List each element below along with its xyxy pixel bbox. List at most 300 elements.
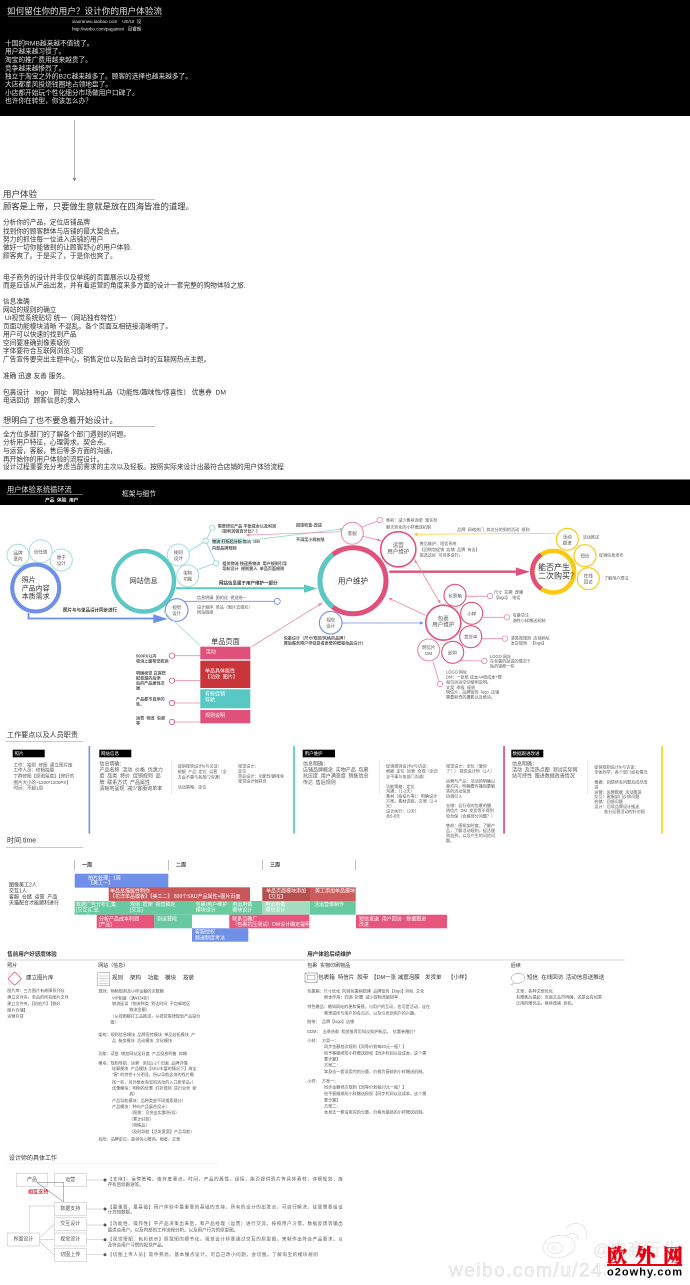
gantt bars: 分析产品成本利润 bbox=[99, 915, 139, 922]
panel: single product page: 明确视觉 白族搭 bbox=[136, 669, 166, 675]
column: photo library: 建立文件夹。【拍拍片】【修好 bbox=[7, 1000, 61, 1006]
team note: 图像美工2人 bbox=[9, 882, 37, 889]
column: data follow-up: 进 bbox=[594, 783, 598, 789]
column: photo library: 照片 bbox=[7, 962, 17, 969]
band label: 框架与细节 bbox=[122, 489, 156, 498]
text block: information accuracy: 空间要准确到像素级别 bbox=[3, 338, 70, 346]
column: user care: 传达 售后规则 bbox=[303, 779, 336, 786]
column: website: （累计好款） bbox=[129, 1115, 154, 1121]
heading: after-sale: 用户体验后续维护 bbox=[307, 950, 352, 958]
arrow: user care to repeat purchase bbox=[389, 568, 530, 576]
column: follow-up: 有赠售后提起：页面文品符明确，还是会有如果 bbox=[516, 993, 602, 999]
gantt bars: 活运营像制作 bbox=[314, 901, 344, 908]
circle group: repeat purchase: 能否产生 bbox=[538, 562, 570, 572]
column: user care: 促销规则设计le与访谈： bbox=[386, 762, 430, 768]
gantt bars: 短信发送 用户回访 · 数据跟进 bbox=[359, 915, 426, 922]
column: parcel print: 减震泡膜 bbox=[398, 973, 420, 981]
circle group: parcel care: 小样 bbox=[467, 610, 477, 617]
circle group: repeat purchase: 短信 bbox=[580, 552, 590, 559]
week ticks: 三周 bbox=[270, 862, 280, 868]
gantt bars: 单品页面模块添加 bbox=[266, 888, 306, 895]
week ticks: 一周 bbox=[82, 862, 92, 868]
column: parcel print: 特色赠品：赠如网站的便和情感。与用户的互动，也可是活动，诠在 bbox=[307, 1002, 430, 1008]
column: parcel print: 特信片 bbox=[338, 973, 354, 981]
column: parcel print: 同步金额档次规则【同等价划每20元一瓶？】 bbox=[324, 1042, 406, 1048]
column: photo library: 运营存贷 bbox=[7, 1012, 24, 1018]
column: parcel print: 【DM一张 bbox=[371, 973, 397, 981]
column: data follow-up: 设计：后续品牌设计推送 bbox=[594, 802, 639, 808]
logo: o2owhy: 欧外网 bbox=[607, 1240, 683, 1269]
author credit: http://weibo.com/pagainini 目睿朗 bbox=[72, 25, 142, 32]
text block: information accuracy: 电话回访 顾客信息的录入 bbox=[3, 395, 81, 404]
column: website: 品 服务模块 活动模块 文化模块 bbox=[112, 1036, 172, 1042]
circle group: user care: 赛后服务用户带促意者更要的赠驱动品设计） bbox=[284, 639, 366, 645]
circle group: parcel care: 每位运运空间使用说明。 bbox=[446, 678, 491, 684]
column: parcel print: 胶带： 品牌【logo】店铺 bbox=[307, 1018, 354, 1024]
column: website info: 活动策略：定位 bbox=[178, 783, 206, 789]
circle group: user care: 运营 bbox=[393, 541, 404, 549]
circle group: website info: 架构 bbox=[183, 569, 193, 576]
column: user care: 明信片 DM 发货等不得到 bbox=[446, 806, 494, 812]
icon: weibo logo bbox=[542, 1223, 587, 1260]
text block: ecommerce design: 而是应该从产品出发，并有着运营的角度来多方面的设计一套完整的购物体验之旅. bbox=[3, 280, 246, 289]
subheading: 顾客是上帝，只要做生意就是放在四海皆准的道理。 bbox=[3, 202, 194, 212]
column: website: 值） bbox=[110, 1018, 118, 1024]
panel: single product page: 运费 物流 包邮 bbox=[136, 714, 165, 720]
gantt bars: 赠送制度考法 bbox=[195, 934, 225, 941]
gantt bars bbox=[75, 874, 447, 942]
circle group: website info: 相关物流 快递费物流 用户规则引导 bbox=[222, 560, 287, 566]
column: photo: 图片大小的~1200*1200PX】 bbox=[14, 778, 71, 786]
circle group: parcel care: 溶性小样赠送机制 bbox=[513, 616, 545, 622]
gantt bars: 单品总描属性制作 bbox=[110, 888, 150, 895]
text block: visual: 及符合用户习惯的视觉产品。 bbox=[108, 1241, 166, 1248]
intro text: 淘宝的推广费用越来越贵了。 bbox=[5, 54, 92, 64]
column: user care: 根据 定位 运营 合规（全自 bbox=[386, 767, 438, 773]
panel: single product page: 属 bbox=[136, 684, 140, 690]
circle group: website info: （能利润做百分比？） bbox=[219, 527, 260, 533]
text block: interaction: 最适合用户。以及内部的工作流程分析。以及用户行为的原型图。 bbox=[108, 1226, 238, 1233]
circle group: parcel care: 发货规则 【logo】 bbox=[511, 639, 546, 645]
arrow: website to user care bbox=[176, 580, 317, 593]
text block: information accuracy: 信息准确 bbox=[3, 296, 30, 305]
column: website info: 视觉设计： bbox=[238, 762, 258, 768]
org chart: 产品 bbox=[27, 1176, 37, 1183]
column: website info: 牌 联系方式 产品属性 bbox=[100, 779, 150, 786]
text block: information accuracy: 准确 迅速 友善 服务。 bbox=[3, 370, 69, 380]
org chart bbox=[7, 1173, 106, 1261]
text block: data support: 【最重要、最基础】用户体验中最重要的基础的支持。所有的设计的出发点，可自行解决。往里需要给设 bbox=[108, 1203, 343, 1210]
arrow: website to user care: 网站信息属于用户维护一部分 bbox=[219, 580, 278, 586]
circle group: repeat purchase: 活动 bbox=[563, 533, 572, 540]
gantt bars: 客服授权 bbox=[195, 929, 215, 936]
circle group: parcel care: 贴的锁断一些 bbox=[490, 662, 515, 668]
band subtitle: 产品 体验 用户 bbox=[45, 496, 79, 504]
column: website info: 视觉设计倾斜页 bbox=[238, 777, 267, 783]
circle group: parcel care: 需要新奇的摄影以及绝活。 bbox=[446, 693, 495, 699]
column: follow-up: 短信 bbox=[527, 973, 539, 981]
column: user care: 意方向，明确要传播和要解 bbox=[446, 782, 495, 788]
panel: single product page: 后的产品属性次 bbox=[136, 679, 165, 685]
text block: visual: 【视觉搭配、色彩统示】原型图的细节化。视觉设计师要通过交互的原型图。来制作出符合产品要求。以 bbox=[108, 1235, 343, 1242]
logo: o2owhy bbox=[606, 1240, 684, 1281]
column: follow-up bbox=[511, 962, 605, 1005]
circle group: parcel care: 文案 季报 规则 bbox=[446, 684, 475, 690]
circle group: parcel care: LOGO 网址 bbox=[490, 652, 511, 658]
panel: single product page: 【功效 图片】 bbox=[205, 674, 238, 681]
circle group: user care: 包裹设计（尺寸/规范/风格的品牌？ bbox=[284, 634, 347, 640]
circle group: parcel care: 清类视规则 店铺网址 bbox=[511, 634, 550, 640]
intro text: 十国的RMB越来越不值钱了。 bbox=[5, 38, 93, 47]
circle group: user care: 售后维护：短信系统 bbox=[420, 540, 457, 546]
column: website: 模块：规则导航：运营 添加1-2个页面 品牌详情 bbox=[98, 1059, 188, 1065]
gantt bars: [产品] bbox=[99, 921, 112, 928]
circle group: repeat purchase: 活动推送 bbox=[583, 533, 599, 539]
column: parcel print: 【小样】 bbox=[448, 973, 470, 981]
circle group: repeat purchase: 回访 bbox=[584, 578, 593, 585]
gantt bars: 美工添加单品模块 bbox=[315, 888, 355, 895]
column: follow-up: 活动信息送推送 bbox=[566, 973, 605, 981]
column: photo: 照片 bbox=[14, 750, 24, 757]
column: parcel print: 小样： 方案一： bbox=[307, 1036, 338, 1042]
column: user care: 品，了解活动规则，促活规 bbox=[446, 826, 495, 832]
column: parcel print: 本身去一套设用完的分量，价格为基础的小样赠送机制。 bbox=[324, 1108, 426, 1114]
column: website: 找一些，另外根本淘宝的活动的入口新单品。） bbox=[112, 1078, 196, 1084]
org chart: 交互设计 bbox=[60, 1220, 80, 1227]
column: website info: 产品名称 活动 价格 优惠力 bbox=[100, 767, 163, 774]
column: website: 有阳：品牌定位，超领信心赠领。图者，文案 bbox=[98, 1135, 180, 1141]
column: user care: 信息明确： bbox=[303, 760, 328, 767]
circle group: parcel care: DM bbox=[425, 650, 432, 656]
circle group: parcel care: LOGO 网址 bbox=[446, 668, 467, 674]
intro text: 用户越来越习惯了。 bbox=[5, 46, 65, 55]
icon: page bbox=[98, 973, 110, 986]
circle group: parcel care: 在包裹的贴说的情况下 bbox=[490, 657, 531, 663]
panel: single product page: 产品都市自承的 bbox=[136, 695, 165, 701]
column: parcel print: 要计算】 bbox=[324, 1055, 340, 1061]
column: user care: 抗压度 用户满意度 销售信息 bbox=[303, 773, 369, 780]
org chart: 相互支持 bbox=[28, 1188, 48, 1195]
column: website: 轮廓模块 产品模块【SKU丰富的情况下】海宝 bbox=[112, 1064, 196, 1070]
column: website: 网站（信息） bbox=[98, 962, 128, 969]
column: website: 产品模块：种向产品展合设计） bbox=[112, 1102, 169, 1108]
column: website info: 根据 产品 定位 运营 （全 bbox=[178, 768, 227, 774]
gantt bars: 【交互】 bbox=[266, 893, 286, 900]
circle group: visual design: 设计 bbox=[172, 610, 182, 616]
panel: single product page: 500PX以内 bbox=[136, 652, 156, 658]
circle group: parcel care: 尺寸 抗撕 厚膜 bbox=[494, 588, 523, 594]
column: user care: 答的活动信息 bbox=[446, 787, 471, 793]
text block: analysis: 找到你的顾客群体与店铺的最大契合点。 bbox=[3, 226, 123, 235]
circle group: user care: 聊天转化的小样赠送机制 bbox=[386, 523, 431, 529]
column: user care: 运营与产品：活动的明确以 bbox=[446, 777, 495, 783]
panel: single product page: 导航 bbox=[205, 696, 215, 703]
arrows: parcel care links bbox=[388, 559, 440, 615]
column: follow-up: 文案：各种文案优化 bbox=[516, 987, 553, 993]
column: website bbox=[98, 962, 200, 1141]
column: website: 功能：读尝 增加网站足好度 产品投放明鲁 抑稿 bbox=[98, 1050, 187, 1056]
column: parcel print: 发货单 bbox=[425, 973, 442, 981]
heading: work points: 工作要点以及人员职责 bbox=[7, 730, 78, 739]
circle group: website info: 功能 bbox=[183, 575, 193, 582]
panel: single product page: 规则说明 bbox=[205, 712, 225, 719]
column: website: （图景：可突出实惠/折扣） bbox=[129, 1108, 179, 1114]
column: parcel print: 胶带 bbox=[357, 973, 369, 981]
intro text: 大店都拿风投烧钱圈地占领地盘了。 bbox=[5, 79, 112, 88]
gantt bars: 【美工一】 bbox=[88, 880, 113, 887]
column: user care: 天） bbox=[386, 803, 394, 808]
column: parcel print: 方案二： bbox=[324, 1061, 340, 1067]
circle group: website info bbox=[113, 521, 325, 612]
circle group: photo: 信任感 bbox=[34, 548, 48, 555]
column: parcel print: 包裹箱 bbox=[318, 973, 335, 981]
gantt bars: 模块设计 bbox=[232, 906, 252, 913]
column: website: 券） bbox=[129, 1090, 137, 1096]
watermark: weibo bbox=[448, 1223, 678, 1282]
heading: user experience: 用户体验 bbox=[3, 189, 38, 199]
column: website: 物流延误（物流种类 到达时间 不包邮地区 bbox=[112, 1000, 190, 1006]
circle group: photo: 产品内容 bbox=[22, 583, 50, 592]
org chart: 数据支持 bbox=[60, 1205, 80, 1212]
column: website: 模块 bbox=[165, 974, 177, 982]
circle group: user care: 【回购包促销 店铺 品牌 有击】 bbox=[420, 546, 480, 552]
circle group: user care: 挑选这好 可持多进行。 bbox=[420, 551, 463, 557]
heading: designer work: 设计师的具体工作 bbox=[9, 1154, 57, 1162]
org chart: 界面设计 bbox=[13, 1236, 33, 1242]
column: website info: 度 品类 特价 促销规则 品 bbox=[100, 773, 161, 780]
column: website: 按装 bbox=[183, 974, 195, 982]
text block: data support: 计方知数据。 bbox=[108, 1208, 135, 1215]
circle group: parcel care: 包裹箱 bbox=[448, 592, 462, 599]
column: photo: 时间：不超1周 bbox=[14, 784, 43, 791]
column: parcel print: EDM： 当季热款 相关推荐页知议知护新品。 优惠券赠后？ bbox=[307, 1028, 417, 1034]
panel: intro band bbox=[0, 0, 690, 116]
text block: communication: 设计过程重要充分考虑当前需求的主次以及轻板。按照实际来设计出最符合店铺的用户体验流程 bbox=[3, 462, 284, 470]
panel: single product page: 等 bbox=[136, 719, 140, 725]
intro text: 小店都开始玩个性化细分市场做用户口碑了。 bbox=[5, 88, 139, 96]
column: photo library: 建立图片库 bbox=[26, 974, 54, 982]
column: user care: 较为保（合格部分问题？） bbox=[446, 812, 495, 818]
circle group: user care: 设计 bbox=[326, 622, 336, 629]
flow diagram bbox=[7, 516, 629, 725]
column: user care bbox=[303, 750, 495, 842]
circle group: photo: 便于 bbox=[57, 554, 66, 560]
column: user care: 功能策略：定位 bbox=[386, 782, 415, 788]
column: photo library: 图片存储】 bbox=[7, 1006, 28, 1012]
column: parcel print: 方案二： bbox=[324, 1102, 340, 1108]
circle group: visual design bbox=[165, 594, 280, 621]
watermark: weibo: weibo.com/u/2431201 bbox=[448, 1260, 663, 1282]
column: parcel print: 根本作用：四调 折腰 减少捉物流破损率 bbox=[324, 993, 398, 999]
column: website: 架构 bbox=[130, 974, 142, 982]
arrow: photo to website: 照片与与单品设计同步进行 bbox=[63, 606, 117, 614]
column: website info bbox=[99, 750, 284, 795]
heading: time: 时间.time bbox=[7, 836, 36, 844]
column: user care: 共5-8天 bbox=[386, 812, 400, 818]
column: follow-up: 后续 bbox=[511, 962, 521, 969]
arrows: feedback bbox=[245, 528, 343, 541]
intro text: 竞争越来越惨烈了。 bbox=[5, 63, 65, 72]
column: user care: 则益到，以及产生的风险问 bbox=[446, 832, 495, 838]
column: website: 优惠模块：明明的优惠 打折规则 进行业务 新 bbox=[112, 1084, 197, 1090]
panel: single product page: 单品具体属性 bbox=[205, 667, 235, 674]
circle group: website info: 需要研究产品 平衡成本以及利润 bbox=[218, 522, 276, 528]
intro text: 也许你在转型，你该怎么办？ bbox=[5, 96, 92, 104]
bar: blue divider bbox=[88, 746, 90, 834]
icon: speech bubble bbox=[511, 973, 525, 985]
column: photo: 丁群修图【原图留底】【修好的 bbox=[14, 772, 75, 779]
bar: teal divider bbox=[293, 746, 295, 834]
text block: information accuracy: 用户可以快速的找到产品 bbox=[3, 329, 77, 338]
column: user care: 题。 bbox=[446, 838, 454, 842]
column: data follow-up: 促销规则设计le与访谈： bbox=[594, 763, 638, 769]
icon: diamond bbox=[8, 972, 21, 985]
panel: work points and responsibilities bbox=[6, 730, 663, 842]
circle group: visual design: 网站链接 bbox=[197, 608, 213, 614]
circle group: website info: 导航设计 规则置入 单品页面规则 bbox=[222, 564, 284, 570]
column: photo: 工作：拍照 修图 建立图片库 bbox=[14, 761, 73, 768]
text block: analysis: 顾客爽了。于是买了，于是你也爽了。 bbox=[3, 250, 117, 260]
circle group: parcel care: 明信片 bbox=[422, 644, 436, 650]
circle group: parcel care: 有备货注 bbox=[513, 611, 529, 617]
column: user care: 店铺品牌概念 实物产品 包裹 bbox=[303, 767, 369, 774]
column: website: 架构：规则信息模块 品牌宣传模块 单品若拓模块 产 bbox=[98, 1030, 195, 1036]
circle group: repeat purchase: 促销信息发布 bbox=[599, 551, 624, 557]
text block: communication: 全方位多部门的了解各个部门遇到的问题。 bbox=[3, 429, 130, 438]
arrow: photo to website bbox=[28, 606, 168, 623]
column: data follow-up bbox=[511, 750, 648, 814]
circle group: website info: 内部品牌规则 bbox=[212, 544, 237, 550]
column: user care: 用户维护 bbox=[304, 750, 323, 757]
panel: pre-sale experience bbox=[5, 950, 625, 1141]
column: photo library: 建立文件夹，单品的所有图片文件 bbox=[7, 993, 69, 999]
circle group: user care: 用户维护 bbox=[387, 548, 410, 556]
gantt bars: 用运用做 bbox=[232, 901, 252, 908]
circle group: repeat purchase bbox=[414, 526, 629, 592]
circle group: user care: 客服 bbox=[348, 530, 357, 537]
logo: o2owhy: o2owhy.com bbox=[607, 1267, 682, 1279]
circle group: user care bbox=[284, 516, 480, 645]
column: data follow-up: 活动 及活热点图 测试实际网 bbox=[512, 767, 578, 774]
column: data follow-up: 各分运营活动的针对报 bbox=[604, 808, 645, 814]
column: parcel print: 给予客服绑形小样赠送授权【同步利润以及成本，这个需 bbox=[324, 1049, 426, 1055]
column: user care: 仓储：运行现的包裹的摄 bbox=[446, 802, 491, 808]
panel: designer work bbox=[5, 1154, 343, 1261]
column: data follow-up: 交互：客服部门反馈问题 bbox=[594, 792, 639, 798]
column: data follow-up: 站可持性 跟进数据改善情况 bbox=[512, 773, 575, 780]
column: photo: 工作人员：修辑拍摄 bbox=[14, 766, 54, 773]
column: parcel print: 给予客服绑形小样赠送授权【同步利润以及成本，这个需 bbox=[324, 1090, 426, 1096]
column: website: VIP制度（满¥打¥折） bbox=[112, 994, 152, 1000]
column: parcel print bbox=[305, 962, 470, 1114]
column: user care: 设计执行：（2天） bbox=[386, 807, 419, 813]
column: parcel print: 哪里或所与用户的有点点，以及引发到用户的兴趣。 bbox=[324, 1009, 418, 1015]
text block: support: 【支持】、运营策略。库存度重点。时间。产品的属性。组接。能否提供照片等具体素材，详细规划，库 bbox=[108, 1175, 343, 1182]
column: website info: 定位 bbox=[238, 767, 246, 773]
circle group: repeat purchase: 了解用户想法 bbox=[604, 574, 629, 580]
gantt bars: 【花洋单品模板】【美工二】 800个SKU产品属性+图片页面 bbox=[110, 893, 240, 900]
column: website: 规则 bbox=[112, 974, 123, 982]
text block: information accuracy: 广告宣传要突出主题中心，销售定位以及贴合当时的互联网热点主题。 bbox=[3, 354, 210, 363]
circle group: website info: 规则 bbox=[174, 548, 183, 556]
column: parcel print: 本身去一套设用完的分量，价格为基础的小样赠送机制。 bbox=[324, 1068, 426, 1074]
org chart: 视觉设计 bbox=[60, 1236, 80, 1242]
gantt bars: 联系目确厂 bbox=[232, 915, 257, 922]
bar: yellow divider bbox=[661, 746, 663, 834]
circle group: photo: 意向 bbox=[14, 555, 23, 561]
column: website info: 方会不事与各部门沟通） bbox=[178, 773, 223, 779]
gantt bars: 模块设计 bbox=[265, 906, 285, 913]
text block: interaction: 【功能性、操作性】平产品决策出来后。和产品经理（运营）进行交流。按照用户习惯。数据反馈等输出 bbox=[108, 1220, 343, 1226]
column: website info: 信息明确： bbox=[100, 760, 125, 767]
column: user care: 方案，素材选取，文案（2-4 bbox=[386, 797, 438, 803]
team note: 交互1人 bbox=[9, 888, 27, 895]
circle group: repeat purchase: 品牌 网络热门 其次分的到的活动 规则 bbox=[457, 526, 530, 532]
circle group: parcel care: 用户维护 bbox=[432, 621, 455, 629]
column: photo library: 图片库：三方图片有故障系列存 bbox=[7, 986, 65, 992]
column: user care: 素材（拍拍片等）：明确设计 bbox=[386, 792, 437, 798]
column: website: "客" 的特性十分明显，所以导航这块的找片需 bbox=[112, 1070, 194, 1076]
column: parcel print: 包裹箱：尺寸优化 防雨包裹稍搭建 品牌宣传【logo】网址 文化 bbox=[307, 987, 424, 993]
column: website: （从视图都打工品推送，从视觉策律规划产品投价 bbox=[110, 1012, 200, 1018]
circle group: visual design: 视觉 bbox=[172, 604, 182, 610]
column: data follow-up: 数据跟进改进 bbox=[512, 750, 540, 757]
gantt bars: 模块设计 bbox=[196, 906, 216, 913]
column: user care: 协调引入 bbox=[446, 792, 462, 798]
heading: pre-sale: 售前用户好感度体验 bbox=[7, 950, 57, 958]
gantt bars: 规则 框架 视觉稿定 bbox=[130, 901, 176, 908]
team note: 客服 仓储 运营 产品 bbox=[9, 894, 57, 901]
gantt bars: （包裹抗压测试）DM设计确定提明） bbox=[232, 921, 315, 928]
gantt bars: 拍片处理：1周 bbox=[88, 874, 121, 881]
intro text: 独立于淘宝之外的B2C越来越多了。顾客的选择也越来越多了。 bbox=[5, 71, 192, 80]
panel: single product page: 单品页面 bbox=[211, 637, 240, 646]
circle group: parcel care: 包裹 bbox=[438, 615, 449, 623]
column: website: 功能 bbox=[148, 974, 159, 982]
text block: information accuracy: 网站的规则的确立 bbox=[3, 304, 57, 314]
panel: user experience text bbox=[1, 189, 284, 470]
column: website info: 促销规则设计le与访谈： bbox=[178, 762, 222, 768]
circle group: website info: 设计 bbox=[174, 554, 183, 562]
circle group: parcel care: DM：一张纸 成本A4纸成本+费 bbox=[446, 673, 502, 679]
text block: information accuracy: UI视觉系统贴切 统一（网站独有特性） bbox=[3, 312, 120, 322]
circle group: photo: 本质需求 bbox=[22, 591, 50, 600]
circle group: website info: 网站信息 bbox=[130, 576, 158, 585]
text block: information accuracy: 字体要符合互联网浏览习惯 bbox=[3, 346, 84, 354]
org chart: 运营 bbox=[65, 1176, 75, 1183]
column: website info: 网站信息 bbox=[101, 750, 119, 757]
column: website info: 单品设计：功能性/趣味标 bbox=[238, 772, 284, 778]
circle group: photo bbox=[7, 540, 72, 612]
text block: analysis: 分析你的产品，定位店铺品牌 bbox=[3, 217, 90, 226]
circle group: parcel care: 胶带 bbox=[448, 649, 458, 656]
panel: single product page bbox=[136, 637, 250, 725]
gantt bars: 数据广告分析汇集 bbox=[76, 901, 116, 908]
column: user care: 全不事与各部门沟通） bbox=[386, 772, 427, 778]
org chart: 切图上传 bbox=[60, 1251, 80, 1258]
title: 如何留住你的用户？设计你的用户体验流 bbox=[7, 5, 162, 16]
panel: single product page: 吸消上面帮您招商 bbox=[136, 657, 169, 663]
column: website: （及时导航【活发套案】产品导航） bbox=[129, 1128, 194, 1134]
circle group: parcel care: 发货单 bbox=[464, 633, 478, 640]
gantt bars: 改进 bbox=[359, 921, 369, 928]
column: parcel print: 小样： 方案一： bbox=[307, 1077, 338, 1083]
panel: single product page: 有些促销 bbox=[205, 691, 225, 698]
week ticks: 二周 bbox=[176, 862, 186, 868]
circle group: repeat purchase: 二次购买？ bbox=[538, 570, 578, 580]
circle group: repeat purchase: 在线 bbox=[584, 572, 593, 578]
panel: single product page: 活动 bbox=[206, 649, 216, 656]
